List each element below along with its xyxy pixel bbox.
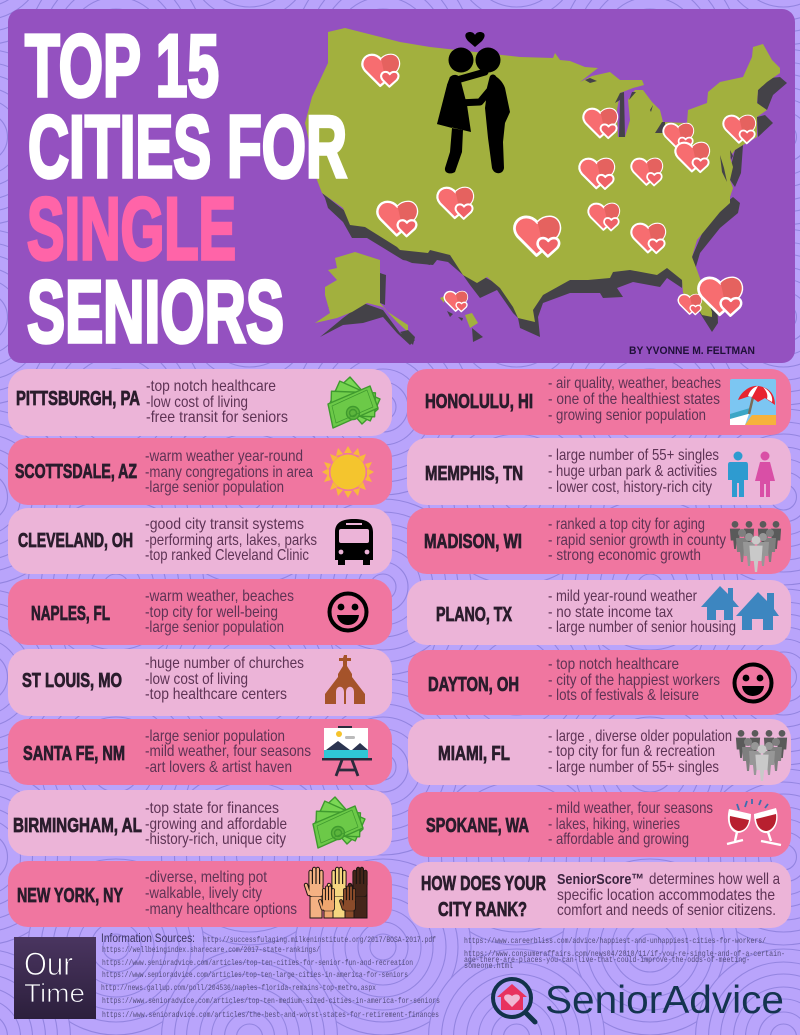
city name: CLEVELAND, OH	[18, 529, 133, 552]
bullet list: -large senior population	[145, 479, 284, 496]
bullet list: -top state for finances	[145, 800, 279, 817]
city name: PLANO, TX	[436, 603, 512, 626]
bullet list: - large number of 55+ singles	[548, 759, 719, 776]
icon: bus	[335, 519, 373, 565]
bullet list: -low cost of living	[146, 394, 248, 411]
bullet list	[548, 375, 721, 424]
bullet list	[145, 800, 287, 848]
city name: BIRMINGHAM, AL	[13, 814, 142, 837]
panel: Honolulu	[407, 369, 791, 435]
bullet list	[145, 516, 317, 564]
information sources: someone.html	[464, 962, 513, 971]
bullet list: - large number of senior housing	[548, 619, 736, 636]
information sources: https://wellbeingindex.sharecare.com/2017-state-rankings/	[102, 946, 320, 955]
panel: Spokane	[408, 792, 791, 857]
bullet list: - lots of festivals & leisure	[548, 687, 699, 704]
bullet list: -large senior population	[145, 728, 285, 745]
title: SINGLE	[27, 179, 236, 278]
bullet list: -warm weather year-round	[145, 448, 303, 465]
icon: smiley	[734, 664, 772, 702]
bullet list: -walkable, lively city	[145, 885, 262, 902]
bullet list: - strong economic growth	[548, 547, 701, 564]
panel: Scottsdale	[8, 438, 392, 505]
bullet list: -top healthcare centers	[145, 686, 287, 703]
panel: Madison	[407, 508, 791, 574]
bullet list: -history-rich, unique city	[145, 831, 286, 848]
bullet list: -good city transit systems	[145, 516, 304, 533]
city name: MADISON, WI	[424, 530, 522, 553]
map: Hawaii	[400, 296, 483, 345]
bullet list: -top city for well-being	[145, 604, 278, 621]
bullet list: -growing and affordable	[145, 816, 287, 833]
icon: magnifier with house	[493, 979, 535, 1022]
bullet list: - large number of 55+ singles	[548, 447, 719, 464]
heading: CITY RANK?	[438, 898, 527, 921]
information sources: https://www.senioradvice.com/articles/top-ten-medium-sized-cities-in-america-for-seniors	[102, 997, 440, 1006]
city name: MIAMI, FL	[438, 742, 510, 765]
icon: church	[325, 655, 365, 704]
bullet list: - large , diverse older population	[548, 728, 732, 745]
bullet list: - lower cost, history-rich city	[548, 479, 712, 496]
bullet list: -huge number of churches	[145, 655, 304, 672]
bullet list: -diverse, melting pot	[145, 869, 267, 886]
icon: sun	[322, 446, 374, 498]
title	[25, 16, 347, 361]
logo: Our Time: Our	[24, 946, 73, 982]
panel: Pittsburgh	[8, 369, 392, 436]
title: SENIORS	[27, 262, 284, 361]
panel: Naples	[8, 579, 392, 645]
icon: money	[313, 797, 365, 848]
panel: St Louis	[8, 649, 392, 716]
logo: Our Time	[14, 937, 96, 1019]
bullet list	[145, 728, 311, 776]
information sources: https://www.senioradvice.com/articles/top-ten-large-cities-in-america-for-seniors	[102, 971, 408, 980]
map: contiguous United States	[305, 28, 787, 337]
wordmark: SeniorAdvice	[545, 979, 784, 1022]
bullet list: -low cost of living	[145, 671, 248, 688]
panel: Cleveland	[8, 508, 392, 574]
bullet list: - one of the healthiest states	[548, 391, 720, 408]
icon: crowd	[730, 521, 781, 572]
panel: header	[8, 9, 795, 363]
bullet list	[548, 447, 719, 496]
icon: man and woman	[728, 452, 775, 497]
panel: Miami	[408, 719, 791, 785]
bullet list: - mild year-round weather	[548, 588, 698, 605]
logo: Our Time: Time	[24, 978, 85, 1008]
city name: MEMPHIS, TN	[425, 462, 523, 485]
bullet list: - top city for fun & recreation	[548, 743, 715, 760]
bullet list	[145, 588, 294, 636]
bullet list: -top ranked Cleveland Clinic	[145, 547, 309, 564]
city name: HONOLULU, HI	[425, 390, 533, 413]
heading: HOW DOES YOUR	[421, 872, 546, 895]
panel: how does your city rank	[408, 862, 791, 928]
bullet list: - city of the happiest workers	[548, 672, 720, 689]
bullet list: -free transit for seniors	[146, 409, 288, 426]
bullet list	[145, 448, 313, 496]
bullet list: -mild weather, four seasons	[145, 743, 311, 760]
icon: crowd	[736, 730, 787, 781]
panel: Memphis	[407, 438, 791, 505]
bullet list: - top notch healthcare	[548, 656, 679, 673]
city name: DAYTON, OH	[428, 673, 519, 696]
title: TOP 15	[25, 16, 219, 115]
bullet list	[548, 656, 720, 704]
bullet list: - no state income tax	[548, 604, 673, 621]
bullet list: -many healthcare options	[145, 901, 297, 918]
logo: SeniorAdvice	[493, 979, 784, 1022]
bullet list: - lakes, hiking, wineries	[548, 816, 680, 833]
bullet list	[548, 588, 736, 636]
information sources: https://www.senioradvice.com/articles/top-ten-cities-for-senior-fun-and-recreation	[102, 959, 413, 968]
icon: money	[328, 377, 380, 428]
title: CITIES FOR	[28, 97, 347, 196]
panel: Santa Fe	[8, 719, 392, 785]
information sources: https://www.senioradvice.com/articles/the-best-and-worst-states-for-retirement-finances	[102, 1011, 439, 1020]
icon: wine glasses	[727, 799, 781, 845]
map: Alaska	[315, 252, 415, 345]
icon: houses	[701, 586, 779, 630]
bullet list: - affordable and growing	[548, 831, 689, 848]
SeniorScore description: SeniorScore™	[557, 871, 644, 888]
city name: SCOTTSDALE, AZ	[15, 460, 137, 483]
bullet list: -many congregations in area	[145, 464, 313, 481]
map hearts	[362, 55, 755, 316]
bullet list: - huge urban park & activities	[548, 463, 717, 480]
panel: Dayton	[408, 650, 791, 715]
bullet list: - growing senior population	[548, 407, 706, 424]
bullet list: - mild weather, four seasons	[548, 800, 713, 817]
bullet list: - rapid senior growth in county	[548, 532, 726, 549]
bullet list	[548, 516, 726, 564]
bullet list	[548, 800, 713, 848]
bullet list	[145, 655, 304, 703]
icon: easel painting	[322, 726, 372, 776]
bullet list: -art lovers & artist haven	[145, 759, 292, 776]
bullet list: -large senior population	[145, 619, 284, 636]
byline: BY YVONNE M. FELTMAN	[629, 345, 755, 357]
information sources: http://news.gallup.com/poll/204536/naples-florida-remains-top-metro.aspx	[101, 984, 376, 993]
icon: raised hands	[306, 869, 368, 918]
bullet list: -performing arts, lakes, parks	[145, 532, 317, 549]
city name: NEW YORK, NY	[17, 884, 123, 907]
city name: SPOKANE, WA	[426, 814, 529, 837]
icon: kissing couple	[437, 32, 510, 173]
bullet list: - air quality, weather, beaches	[548, 375, 721, 392]
panel: Birmingham	[8, 790, 392, 856]
city name: SANTA FE, NM	[23, 742, 125, 765]
city name: ST LOUIS, MO	[22, 669, 122, 692]
icon: beach umbrella	[730, 379, 776, 425]
bullet list	[146, 378, 288, 426]
bullet list	[548, 728, 732, 776]
bullet list: - ranked a top city for aging	[548, 516, 705, 533]
panel: New York	[8, 861, 392, 927]
bullet list	[145, 869, 297, 918]
city name: PITTSBURGH, PA	[16, 387, 140, 410]
information sources	[101, 933, 785, 1020]
icon: smiley	[330, 594, 366, 630]
bullet list: -top notch healthcare	[146, 378, 276, 395]
city name: NAPLES, FL	[31, 602, 110, 625]
information sources: Information Sources:	[101, 933, 195, 945]
SeniorScore description	[557, 871, 780, 919]
bullet list: -warm weather, beaches	[145, 588, 294, 605]
information sources: http://successfulaging.milkeninstitute.org/2017/BOSA-2017.pdf	[203, 936, 436, 945]
panel: Plano	[407, 580, 791, 645]
heading	[421, 872, 546, 921]
